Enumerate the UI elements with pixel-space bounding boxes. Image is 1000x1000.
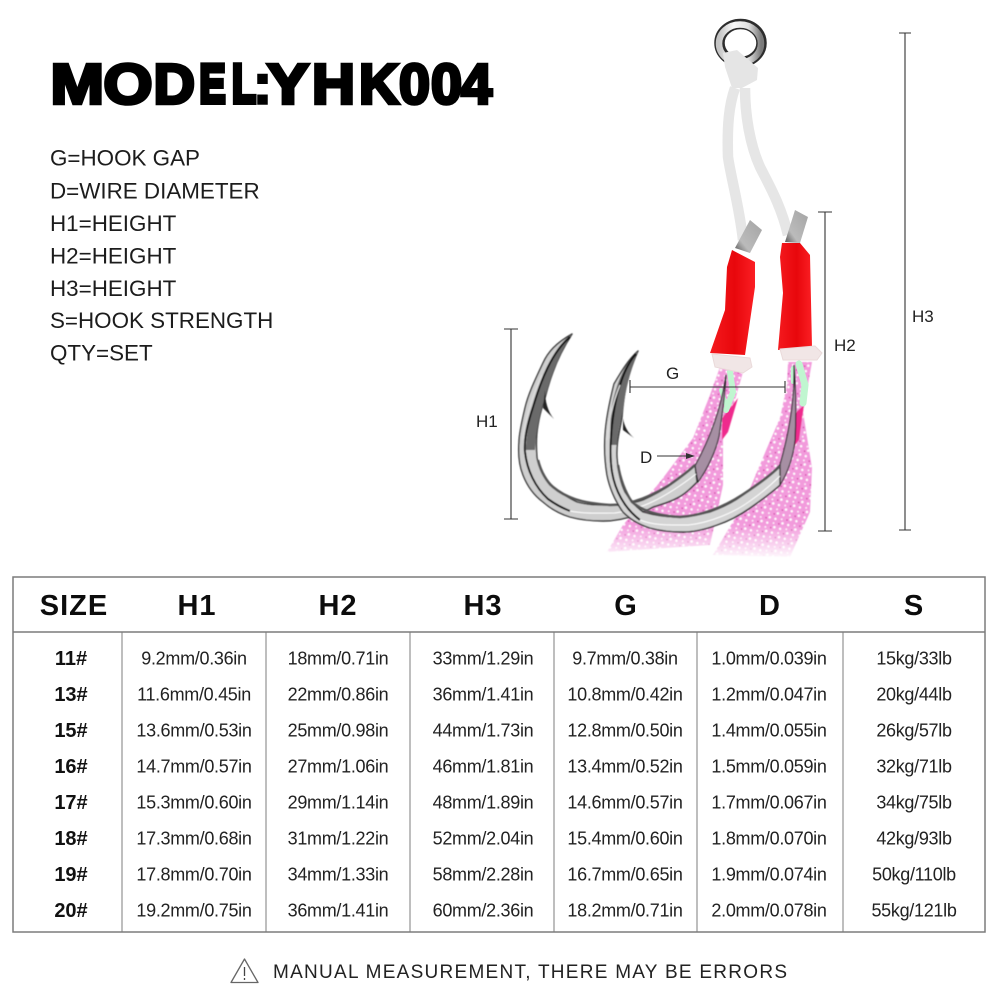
legend: abbreviation definitions: H1=HEIGHT <box>50 211 177 236</box>
table header: S <box>904 590 924 622</box>
legend: abbreviation definitions: QTY=SET <box>50 340 153 366</box>
title: 4 <box>461 52 492 116</box>
white collars <box>712 346 822 373</box>
table header: H3 <box>463 590 503 622</box>
green flash strips <box>721 364 805 410</box>
row 16#: 1.5mm/0.059in <box>711 756 827 776</box>
row 17#: 48mm/1.89in <box>433 792 533 812</box>
row 11#: 11# <box>55 648 87 670</box>
skirt fade <box>600 525 825 560</box>
row 13#: 20kg/44lb <box>876 684 952 704</box>
table header: G <box>614 590 638 622</box>
row 16#: 16# <box>54 756 88 778</box>
row 17#: 17# <box>54 792 88 814</box>
dimension D with arrow <box>640 448 695 467</box>
row 16# <box>54 756 952 778</box>
knot <box>723 50 758 88</box>
row 11#: 9.7mm/0.38in <box>572 648 678 668</box>
pink skirt: left hook <box>607 367 743 552</box>
title: Y <box>267 52 309 116</box>
row 11#: 33mm/1.29in <box>433 648 533 668</box>
left hook <box>519 334 726 521</box>
dimension H2 <box>818 212 856 531</box>
row 20#: 18.2mm/0.71in <box>567 900 683 920</box>
right hook <box>605 351 796 532</box>
dimension H2: H2 <box>834 336 856 355</box>
row 11#: 9.2mm/0.36in <box>141 648 247 668</box>
legend: abbreviation definitions: D=WIRE DIAMETER <box>50 178 260 204</box>
steel ring <box>719 24 762 62</box>
row 19#: 58mm/2.28in <box>433 864 533 884</box>
legend: abbreviation definitions <box>50 146 273 366</box>
title: O <box>104 52 152 116</box>
hook eyes <box>735 210 808 253</box>
row 20#: 20# <box>54 900 88 922</box>
warning text: MANUAL MEASUREMENT, THERE MAY BE ERRORS <box>273 962 787 983</box>
warning note <box>231 959 787 983</box>
title: E <box>200 52 226 114</box>
table header <box>40 590 924 622</box>
row 19#: 16.7mm/0.65in <box>567 864 683 884</box>
table header: H2 <box>318 590 358 622</box>
table header: H1 <box>177 590 217 622</box>
row 13#: 1.2mm/0.047in <box>711 684 827 704</box>
row 16#: 13.4mm/0.52in <box>567 756 683 776</box>
title: M <box>50 52 104 116</box>
row 18#: 17.3mm/0.68in <box>136 828 252 848</box>
row 16#: 32kg/71lb <box>876 756 952 776</box>
row 17#: 14.6mm/0.57in <box>567 792 683 812</box>
row 13#: 36mm/1.41in <box>433 684 533 704</box>
dimension D with arrow: D <box>640 448 652 467</box>
row 20#: 55kg/121lb <box>871 900 957 920</box>
row 17#: 34kg/75lb <box>876 792 952 812</box>
row 20#: 60mm/2.36in <box>433 900 533 920</box>
dimension H3: H3 <box>912 307 934 326</box>
title: 0 <box>399 52 430 116</box>
legend: abbreviation definitions: H2=HEIGHT <box>50 244 177 268</box>
row 17#: 15.3mm/0.60in <box>136 792 252 812</box>
cords <box>728 88 788 240</box>
red thread wrap: left <box>710 250 755 355</box>
row 17#: 29mm/1.14in <box>288 792 388 812</box>
title: D <box>154 52 195 116</box>
shaded back of left hook <box>526 334 572 450</box>
row 15#: 15# <box>54 720 88 742</box>
row 11# <box>55 648 952 670</box>
title: L <box>232 52 256 114</box>
size table <box>13 577 985 932</box>
row 13#: 10.8mm/0.42in <box>567 684 683 704</box>
row 19#: 50kg/110lb <box>872 864 956 884</box>
row 19#: 19# <box>54 864 88 886</box>
row 18#: 52mm/2.04in <box>433 828 533 848</box>
row 20#: 19.2mm/0.75in <box>136 900 252 920</box>
row 15#: 1.4mm/0.055in <box>711 720 827 740</box>
row 15#: 25mm/0.98in <box>288 720 388 740</box>
title: K <box>359 52 399 116</box>
row 13#: 13# <box>54 684 88 706</box>
row 15#: 44mm/1.73in <box>433 720 533 740</box>
icon: warning triangle <box>231 959 258 982</box>
row 19#: 34mm/1.33in <box>288 864 388 884</box>
row 20# <box>54 900 957 922</box>
legend: abbreviation definitions: G=HOOK GAP <box>50 146 200 170</box>
table header: D <box>759 590 781 622</box>
row 15#: 12.8mm/0.50in <box>567 720 683 740</box>
row 11#: 1.0mm/0.039in <box>711 648 827 668</box>
row 13#: 22mm/0.86in <box>288 684 388 704</box>
row 17#: 1.7mm/0.067in <box>711 792 827 812</box>
row 18#: 31mm/1.22in <box>288 828 388 848</box>
row 11#: 18mm/0.71in <box>288 648 388 668</box>
row 20#: 2.0mm/0.078in <box>711 900 827 920</box>
row 11#: 15kg/33lb <box>876 648 952 668</box>
title: H <box>312 52 355 116</box>
row 19# <box>54 864 956 886</box>
row 18#: 18# <box>54 828 88 850</box>
dimension H3 <box>899 33 934 530</box>
row 18#: 15.4mm/0.60in <box>567 828 683 848</box>
row 16#: 14.7mm/0.57in <box>136 756 252 776</box>
dimension G <box>630 364 785 393</box>
row 15#: 26kg/57lb <box>876 720 952 740</box>
pink skirt: right hook <box>713 362 812 557</box>
title: 0 <box>431 52 462 116</box>
row 13# <box>54 684 952 706</box>
row 18#: 42kg/93lb <box>876 828 952 848</box>
dimension G: G <box>666 364 679 383</box>
legend: abbreviation definitions: H3=HEIGHT <box>50 276 177 301</box>
table grid <box>13 577 985 932</box>
row 16#: 27mm/1.06in <box>288 756 388 776</box>
dimension H1 <box>476 329 518 519</box>
row 18#: 1.8mm/0.070in <box>711 828 827 848</box>
row 19#: 17.8mm/0.70in <box>136 864 252 884</box>
row 15# <box>54 720 952 742</box>
hook illustration <box>519 24 825 560</box>
row 18# <box>54 828 952 850</box>
row 17# <box>54 792 952 814</box>
shaded back of right hook <box>610 351 638 445</box>
dimension H1: H1 <box>476 412 498 431</box>
row 20#: 36mm/1.41in <box>288 900 388 920</box>
row 19#: 1.9mm/0.074in <box>711 864 827 884</box>
row 16#: 46mm/1.81in <box>433 756 533 776</box>
row 13#: 11.6mm/0.45in <box>137 684 251 704</box>
legend: abbreviation definitions: S=HOOK STRENGTH <box>50 308 273 333</box>
title: : <box>253 52 272 116</box>
table header: SIZE <box>40 590 108 622</box>
row 15#: 13.6mm/0.53in <box>136 720 252 740</box>
red thread wrap: right <box>778 243 812 350</box>
